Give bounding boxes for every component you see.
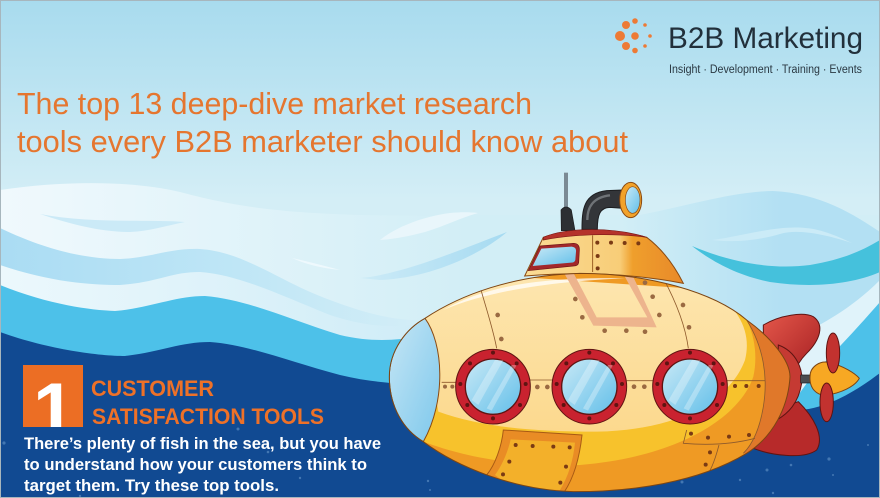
propeller blades bbox=[820, 333, 840, 422]
rear fin: top bbox=[763, 314, 820, 373]
hull top highlight bbox=[443, 278, 625, 310]
number badge: 1: 1 bbox=[33, 368, 75, 453]
top hatch bbox=[563, 272, 657, 327]
section heading bbox=[91, 376, 324, 429]
body text: There’s plenty of fish in the sea, but you have bbox=[24, 434, 381, 453]
section heading: SATISFACTION TOOLS bbox=[92, 404, 324, 429]
logo tagline: Insight · Development · Training · Events bbox=[669, 64, 862, 76]
propeller hub bbox=[810, 362, 859, 395]
logo: B2B Marketing bbox=[615, 18, 863, 76]
background: faint bubbles in deep water bbox=[2, 428, 869, 497]
icon: orange dot cluster bbox=[615, 18, 652, 53]
nose glass bbox=[389, 318, 440, 442]
title: The top 13 deep-dive market research bbox=[17, 86, 532, 121]
periscope bbox=[582, 182, 642, 229]
logo wordmark: B2B Marketing bbox=[668, 22, 863, 55]
rivets bbox=[443, 280, 691, 389]
section heading: CUSTOMER bbox=[91, 376, 214, 401]
panel seams bbox=[442, 278, 765, 477]
hull band: pale cream bbox=[413, 270, 747, 432]
number badge: 1 bbox=[23, 365, 83, 427]
hull band: yellow bbox=[424, 312, 756, 465]
body text: to understand how your customers think to bbox=[24, 455, 367, 474]
porthole: left bbox=[456, 349, 530, 424]
title bbox=[17, 86, 628, 159]
porthole: right bbox=[653, 349, 727, 424]
hull base: orange bbox=[424, 274, 765, 492]
bottom hatch bbox=[487, 430, 582, 493]
antenna bbox=[561, 173, 575, 231]
illustration: yellow submarine bbox=[380, 173, 859, 498]
tail cone bbox=[777, 345, 802, 420]
background: layered sea waves bbox=[0, 183, 880, 498]
body text: target them. Try these top tools. bbox=[24, 476, 279, 495]
propeller shaft bbox=[801, 375, 814, 383]
conning tower bbox=[525, 230, 683, 283]
hull bbox=[388, 272, 790, 492]
porthole: centre bbox=[552, 349, 627, 424]
hull shading: dark stern bbox=[744, 322, 790, 454]
rear fin: bottom bbox=[753, 402, 819, 456]
title: tools every B2B marketer should know about bbox=[17, 124, 628, 159]
body text bbox=[24, 434, 381, 495]
